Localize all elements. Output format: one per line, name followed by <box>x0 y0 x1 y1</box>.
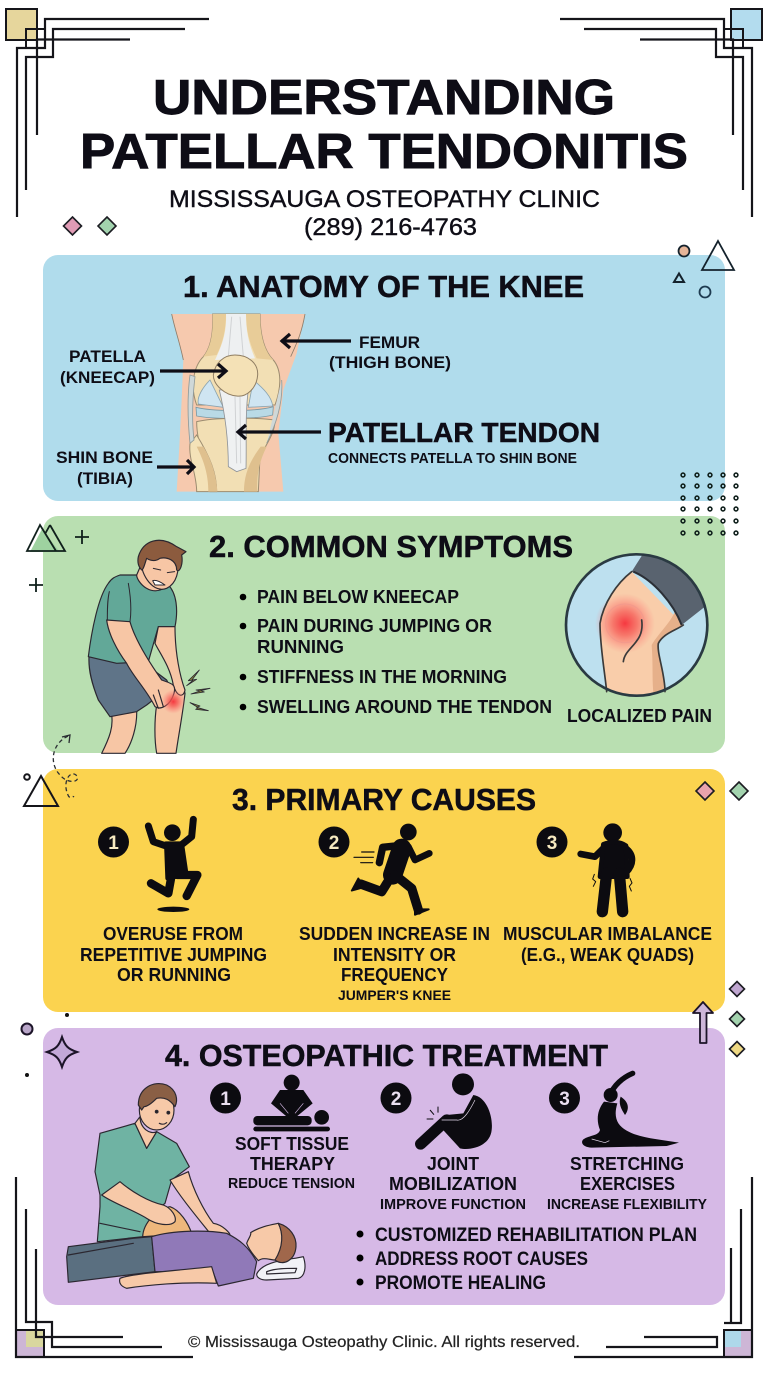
treatment 1: soft tissue therapy: SOFT TISSUE <box>235 1134 349 1154</box>
treatment 1: soft tissue therapy: REDUCE TENSION <box>228 1175 355 1192</box>
cause 1: overuse from jumping: 1 <box>108 833 119 854</box>
cause 2: sudden increase in intensity: FREQUENCY <box>341 965 448 985</box>
corner frame: top right <box>560 9 762 217</box>
cause 2: sudden increase in intensity <box>299 824 490 1003</box>
decorative shapes: mountains and plus signs <box>27 525 89 592</box>
label: patellar tendon: CONNECTS PATELLA TO SHIN BONE <box>328 451 577 467</box>
cause 1: overuse from jumping <box>80 819 267 985</box>
label: femur: (THIGH BONE) <box>329 353 451 372</box>
corner frame: bottom right <box>574 1177 752 1357</box>
title: UNDERSTANDING <box>153 71 615 125</box>
cause 2: sudden increase in intensity: 2 <box>329 833 339 854</box>
title: PATELLAR TENDONITIS <box>80 125 688 179</box>
treatment 3: stretching exercises: INCREASE FLEXIBILITY <box>547 1196 707 1213</box>
subtitle: clinic name and phone: (289) 216-4763 <box>304 214 477 241</box>
panel: anatomy of the knee <box>43 255 725 501</box>
bullet list: symptoms: SWELLING AROUND THE TENDON <box>257 697 552 717</box>
treatment 1: soft tissue therapy <box>210 1075 355 1192</box>
decorative star and dots: treatment <box>22 1013 77 1077</box>
bullet list: symptoms: RUNNING <box>257 637 344 657</box>
heading: anatomy: 1. ANATOMY OF THE KNEE <box>183 269 584 304</box>
bullet list: treatment benefits: CUSTOMIZED REHABILITATION PLAN <box>375 1225 697 1246</box>
illustration: localized pain circle <box>566 553 707 697</box>
decorative diamonds: header <box>64 217 116 235</box>
bullet list: symptoms <box>240 587 552 717</box>
subtitle: clinic name and phone <box>169 186 600 241</box>
bullet list: treatment benefits <box>356 1225 697 1294</box>
decorative diamonds: causes <box>696 782 748 800</box>
label: patella: (KNEECAP) <box>60 368 155 387</box>
title <box>80 71 688 179</box>
heading: symptoms: 2. COMMON SYMPTOMS <box>209 529 573 564</box>
decorative dot grid <box>681 473 738 535</box>
treatment 3: stretching exercises <box>547 1073 707 1213</box>
decorative triangle and ring: causes <box>24 774 58 806</box>
cause 2: sudden increase in intensity: INTENSITY OR <box>333 945 456 965</box>
bullet list: treatment benefits: ADDRESS ROOT CAUSES <box>375 1249 588 1270</box>
treatment 2: joint mobilization: 2 <box>391 1089 401 1110</box>
cause 3: muscular imbalance <box>503 823 712 965</box>
panel: common symptoms <box>43 516 725 753</box>
panel: osteopathic treatment <box>43 1028 725 1305</box>
corner frame: top left <box>6 9 209 217</box>
cause 2: sudden increase in intensity: JUMPER'S KNEE <box>338 987 451 1003</box>
decorative dashed arrow <box>53 735 77 797</box>
treatment 2: joint mobilization <box>380 1073 526 1213</box>
cause 3: muscular imbalance: 3 <box>547 833 557 854</box>
treatment 1: soft tissue therapy: 1 <box>220 1089 231 1110</box>
bullet list: treatment benefits: PROMOTE HEALING <box>375 1273 546 1294</box>
subtitle: clinic name and phone: MISSISSAUGA OSTEOPATHY CLINIC <box>169 186 600 213</box>
treatment 2: joint mobilization: IMPROVE FUNCTION <box>380 1196 526 1213</box>
treatment 3: stretching exercises: STRETCHING <box>570 1154 684 1174</box>
treatment 2: joint mobilization: MOBILIZATION <box>389 1174 517 1194</box>
label: patella <box>60 347 155 387</box>
treatment 3: stretching exercises: EXERCISES <box>580 1174 675 1194</box>
cause 3: muscular imbalance: MUSCULAR IMBALANCE <box>503 924 712 944</box>
cause 3: muscular imbalance: (E.G., WEAK QUADS) <box>521 945 694 965</box>
arrow: femur <box>281 334 351 348</box>
treatment 1: soft tissue therapy: THERAPY <box>250 1154 335 1174</box>
cause 2: sudden increase in intensity: SUDDEN INCREASE IN <box>299 924 490 944</box>
illustration: man holding painful knee <box>88 540 210 753</box>
arrow: shin bone <box>157 460 194 474</box>
arrow: patella <box>160 364 226 378</box>
heading: causes: 3. PRIMARY CAUSES <box>232 782 536 817</box>
decorative diamonds: right side <box>730 982 744 1056</box>
decorative shapes: top right of anatomy panel <box>674 241 734 298</box>
label: femur <box>329 333 451 372</box>
label: shin bone <box>56 448 153 488</box>
panel: primary causes <box>43 769 725 1012</box>
label: patellar tendon <box>328 417 600 467</box>
label: patella: PATELLA <box>69 347 146 366</box>
label: shin bone: SHIN BONE <box>56 448 153 467</box>
treatment 2: joint mobilization: JOINT <box>427 1154 479 1174</box>
label: femur: FEMUR <box>359 333 420 352</box>
heading: treatment: 4. OSTEOPATHIC TREATMENT <box>165 1038 608 1073</box>
label: localized pain: LOCALIZED PAIN <box>567 706 712 726</box>
cause 1: overuse from jumping: REPETITIVE JUMPING <box>80 945 267 965</box>
bullet list: symptoms: PAIN DURING JUMPING OR <box>257 616 492 636</box>
illustration: osteopath treating patient <box>67 1084 305 1288</box>
treatment 3: stretching exercises: 3 <box>559 1089 570 1110</box>
knee diagram <box>172 314 305 492</box>
label: patellar tendon: PATELLAR TENDON <box>328 417 600 448</box>
arrow: patellar tendon <box>238 425 321 439</box>
footer: © Mississauga Osteopathy Clinic. All rights reserved. <box>188 1334 580 1351</box>
label: shin bone: (TIBIA) <box>77 469 133 488</box>
cause 1: overuse from jumping: OR RUNNING <box>117 965 231 985</box>
bullet list: symptoms: PAIN BELOW KNEECAP <box>257 587 459 607</box>
cause 1: overuse from jumping: OVERUSE FROM <box>103 924 243 944</box>
bullet list: symptoms: STIFFNESS IN THE MORNING <box>257 667 507 687</box>
icon: up arrow <box>693 1002 713 1043</box>
corner frame: bottom left <box>16 1177 193 1357</box>
